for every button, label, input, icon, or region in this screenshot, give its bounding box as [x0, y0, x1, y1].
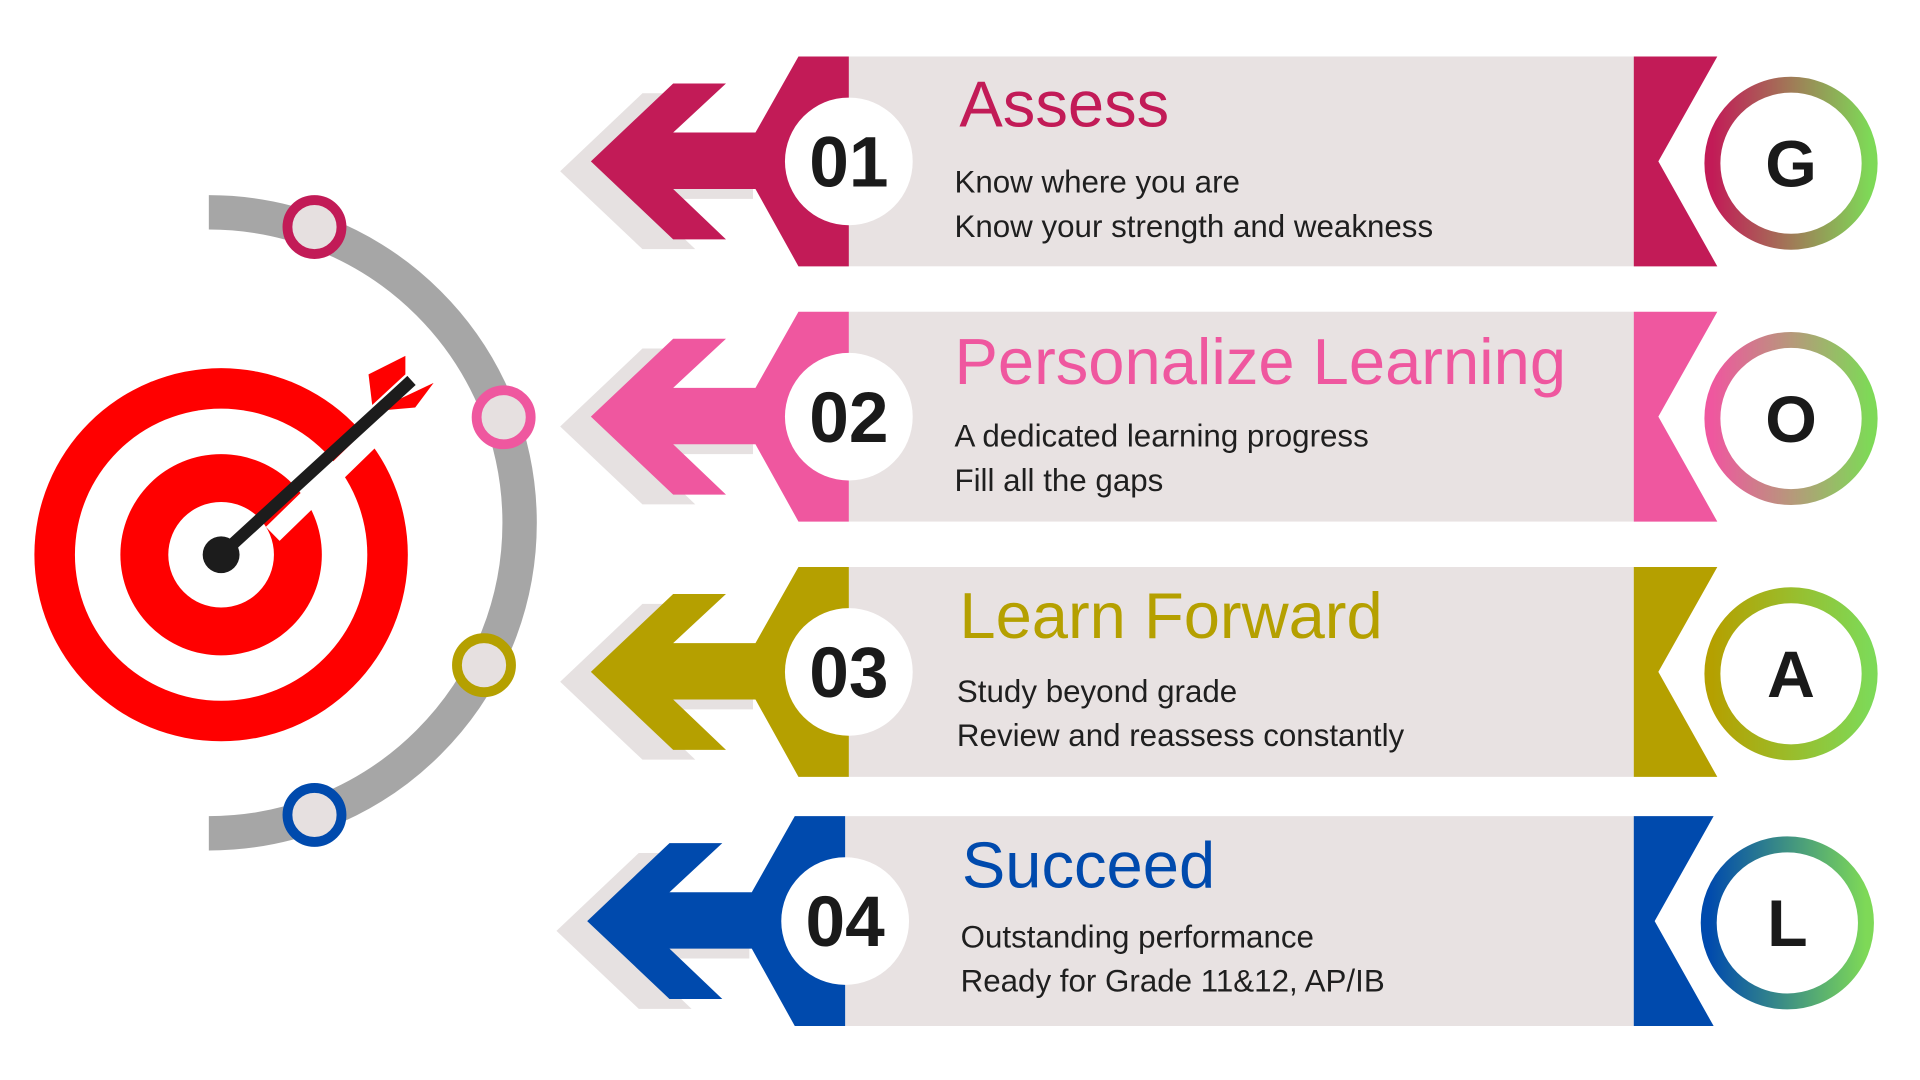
row 3: Learn Forward	[560, 567, 1870, 777]
row 2: Personalize Learning: Personalize Learning	[954, 325, 1566, 398]
row 1: Assess	[560, 56, 1870, 266]
row 4: Succeed: Outstanding performance	[961, 919, 1314, 954]
row 4: Succeed: Succeed	[962, 828, 1215, 901]
icon: target with dart	[34, 356, 434, 741]
row 4: Succeed: Ready for Grade 11&12, AP/IB	[961, 964, 1385, 999]
row 4: Succeed: L	[1767, 887, 1808, 961]
row 3: Learn Forward: Study beyond grade	[957, 674, 1237, 709]
row 3: Learn Forward: Review and reassess constantly	[957, 718, 1405, 753]
row 2: Personalize Learning: Fill all the gaps	[954, 463, 1163, 498]
row 2: Personalize Learning	[560, 312, 1870, 522]
row 1: Assess: 01	[809, 124, 888, 203]
row 2: Personalize Learning: 02	[809, 379, 888, 458]
row 1: Assess: Assess	[959, 67, 1169, 140]
row 1: Assess: Know your strength and weakness	[954, 209, 1433, 244]
row 1: Assess: Know where you are	[954, 165, 1240, 200]
row 4: Succeed: 04	[806, 883, 885, 962]
orbit arc with dots	[209, 200, 531, 842]
row 2: Personalize Learning: A dedicated learning progress	[954, 419, 1369, 454]
row 3: Learn Forward: 03	[809, 634, 888, 713]
row 2: Personalize Learning: O	[1765, 383, 1817, 457]
row 1: Assess: G	[1765, 128, 1817, 202]
row 3: Learn Forward: Learn Forward	[959, 579, 1383, 652]
row 3: Learn Forward: A	[1767, 638, 1815, 712]
row 4: Succeed	[556, 816, 1866, 1026]
